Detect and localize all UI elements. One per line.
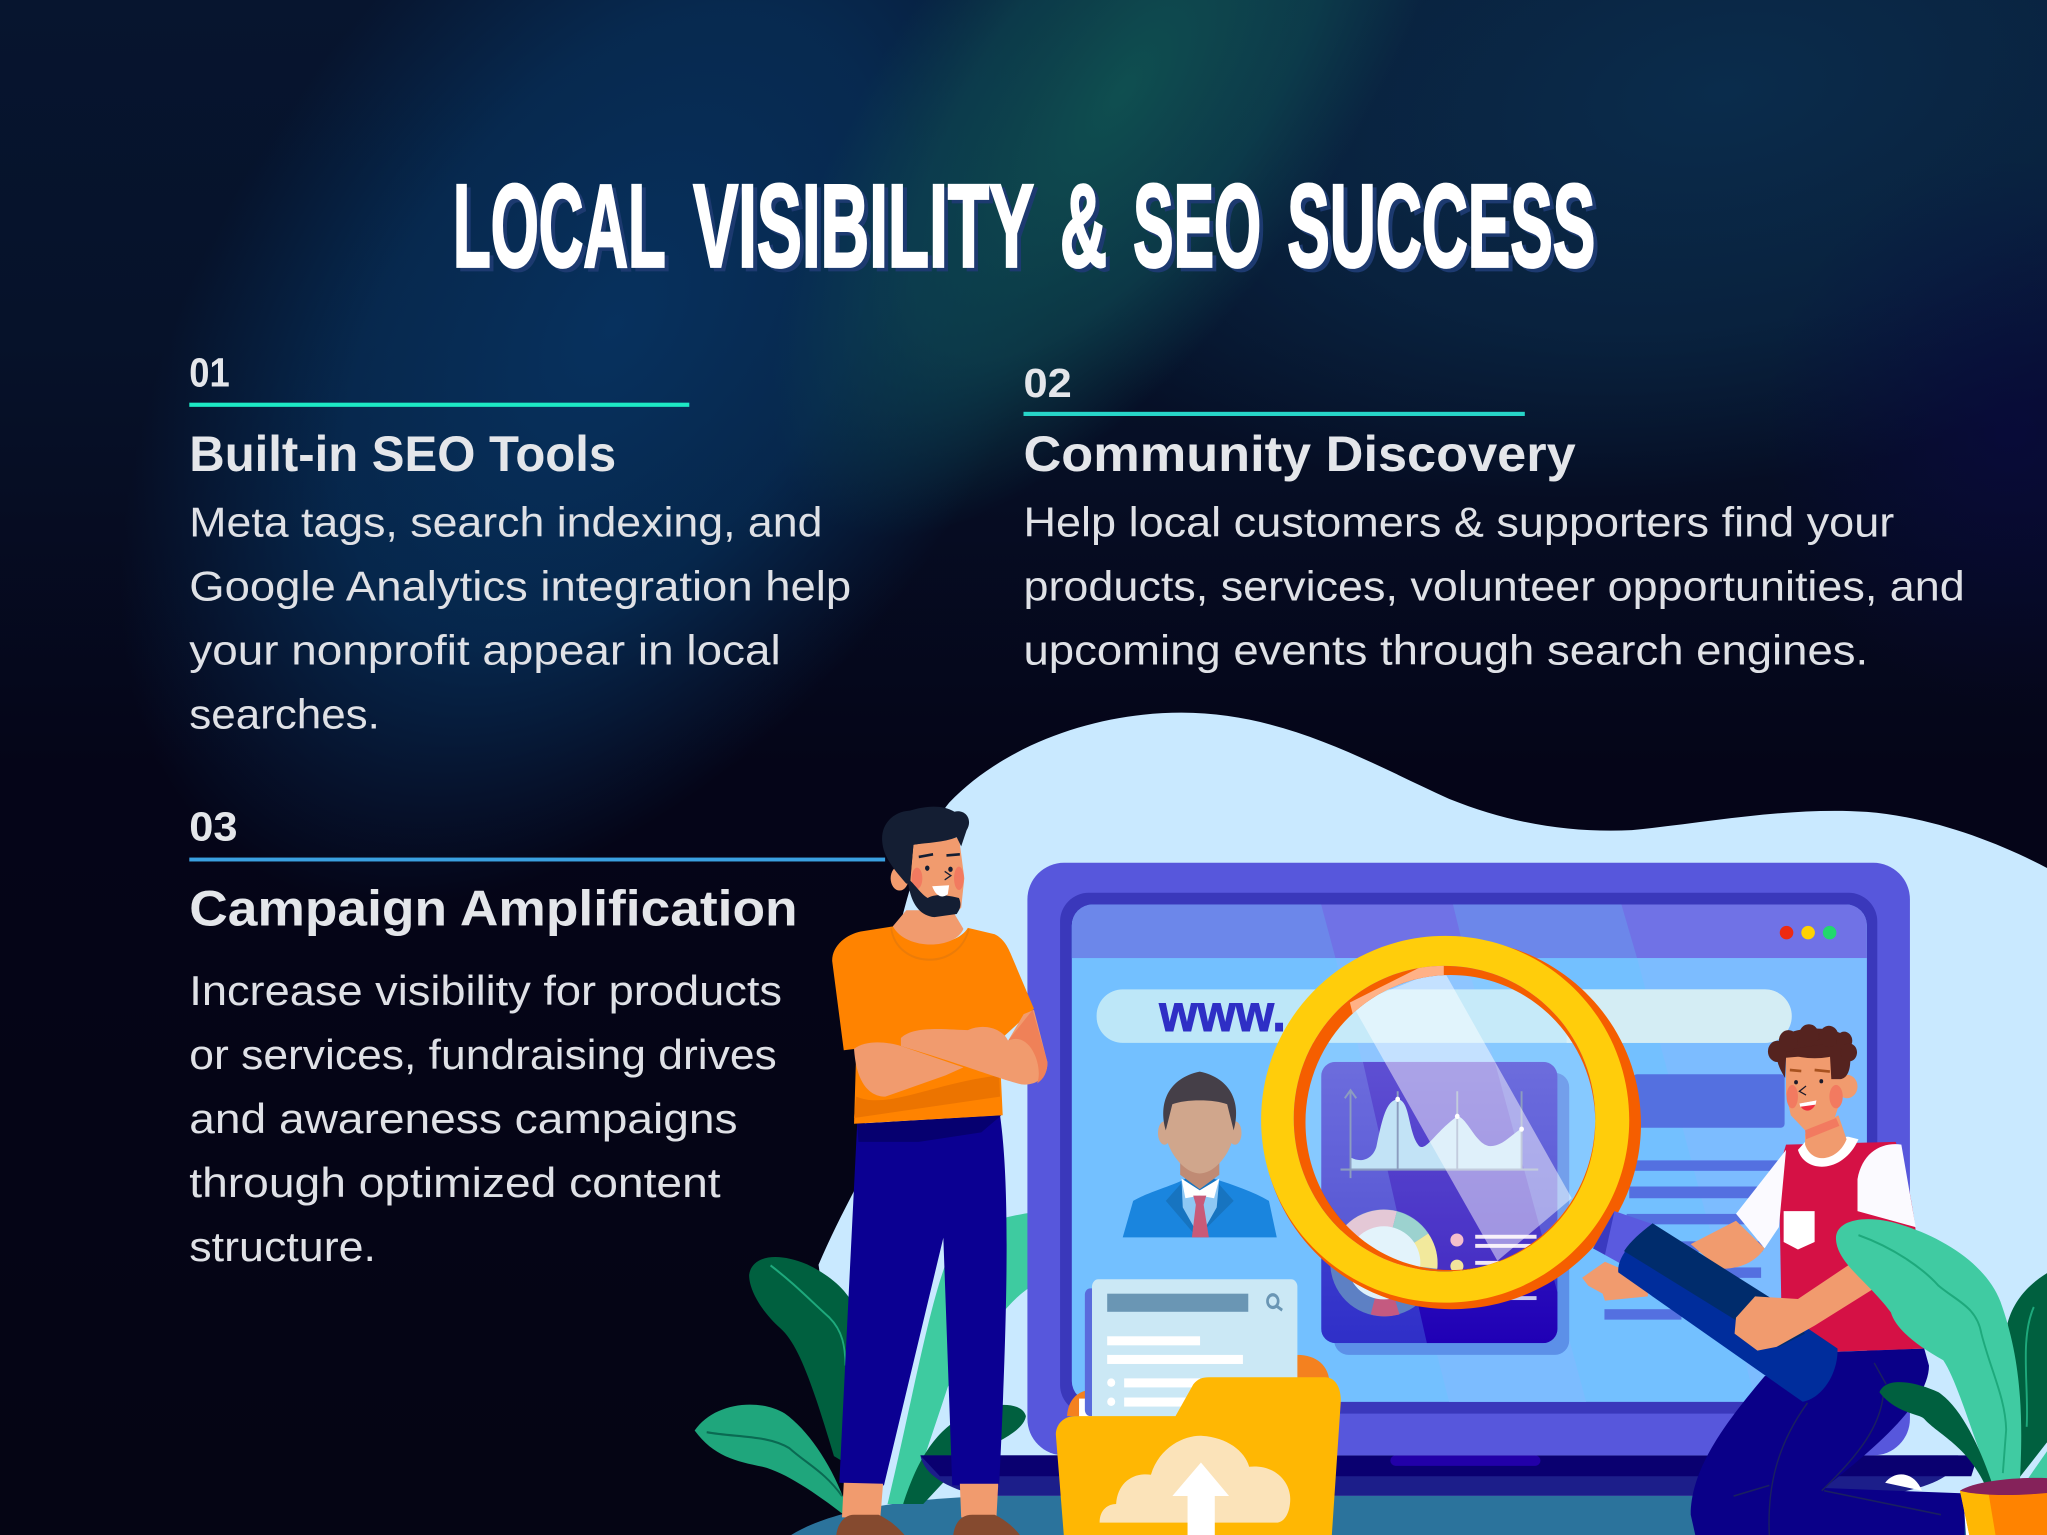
number 02: 02 <box>1024 360 1072 406</box>
panel: illustration <box>695 713 2047 1535</box>
panel: 02 community discovery <box>1024 360 1965 673</box>
title text: SEO <box>1133 160 1261 291</box>
person: standing man <box>832 807 1047 1535</box>
vest <box>1779 1142 1925 1352</box>
arm behind handle <box>1691 1221 1765 1269</box>
dashboard list <box>1450 1233 1537 1300</box>
number 01: 01 <box>189 349 230 395</box>
body text <box>189 967 782 1270</box>
body text: Help local customers & supporters find your <box>1024 498 1894 545</box>
left hand <box>1582 1262 1648 1301</box>
title text: VISIBILITY <box>693 160 1034 291</box>
title text: LOCAL <box>453 160 666 291</box>
panel: 01 built-in SEO tools <box>189 349 851 737</box>
ground <box>791 1496 2047 1535</box>
sleeves <box>1736 1144 1916 1248</box>
title shadow: SUCCESS <box>1291 164 1599 295</box>
title <box>453 160 1599 295</box>
panel: 03 campaign amplification <box>189 804 885 1270</box>
title shadow: VISIBILITY <box>697 164 1038 295</box>
body text <box>1024 498 1965 673</box>
background blob <box>819 713 2047 1535</box>
laptop base <box>920 1455 1978 1496</box>
accent line <box>1024 412 1525 416</box>
right plant and pot <box>1836 1219 2047 1535</box>
title text: & <box>1060 160 1107 291</box>
head <box>882 807 969 919</box>
title shadow: & <box>1064 164 1111 295</box>
dashboard panel <box>1321 1062 1569 1355</box>
cloud <box>1100 1436 1290 1523</box>
trousers <box>839 1115 1007 1485</box>
accent line <box>189 858 885 861</box>
body text: or services, fundraising drives <box>189 1031 777 1078</box>
heading: Community Discovery <box>1024 426 1576 482</box>
body text: your nonprofit appear in local <box>189 626 781 673</box>
title shadow: SEO <box>1137 164 1265 295</box>
folder with cloud upload <box>1056 1279 1341 1535</box>
body text: through optimized content <box>189 1159 721 1206</box>
search document <box>1092 1279 1297 1434</box>
upload arrow <box>1172 1462 1229 1535</box>
monitor <box>1027 863 1910 1455</box>
donut chart <box>1330 1209 1438 1316</box>
head <box>1768 1024 1858 1139</box>
body text: and awareness campaigns <box>189 1095 738 1142</box>
shoe <box>1885 1474 1976 1535</box>
left plants <box>695 1212 1033 1515</box>
body text: searches. <box>189 690 380 737</box>
accent line <box>189 403 689 407</box>
crossed arms <box>854 1010 1047 1118</box>
body text: structure. <box>189 1223 376 1270</box>
body text: Google Analytics integration help <box>189 562 851 609</box>
trousers <box>1691 1349 1965 1535</box>
browser dots <box>1780 926 1836 939</box>
title text <box>453 160 1595 291</box>
profile avatar <box>1123 1072 1277 1237</box>
body text <box>189 498 851 737</box>
magnifying glass <box>1261 936 1641 1309</box>
url bar: www. <box>1158 985 1286 1043</box>
neck <box>893 910 963 945</box>
url bar <box>1097 985 1792 1043</box>
person: kneeling man <box>1582 1024 1976 1535</box>
heading: Campaign Amplification <box>189 880 798 936</box>
right arm and hand <box>1735 1259 1874 1351</box>
title shadow: LOCAL <box>457 164 670 295</box>
body text: products, services, volunteer opportunities, and <box>1024 562 1965 609</box>
magnifier handle <box>1593 1211 1838 1402</box>
heading: Built-in SEO Tools <box>189 426 616 482</box>
body text: Meta tags, search indexing, and <box>189 498 822 545</box>
body text: Increase visibility for products <box>189 967 782 1014</box>
area chart <box>1341 1090 1538 1178</box>
number 03: 03 <box>189 804 238 850</box>
legs and shoes <box>836 1483 1021 1535</box>
title text: SUCCESS <box>1287 160 1595 291</box>
neck and collar <box>1798 1115 1858 1167</box>
title shadow <box>457 164 1599 295</box>
pocket <box>1784 1211 1815 1249</box>
body text: upcoming events through search engines. <box>1024 626 1868 673</box>
content bars <box>1604 1074 1789 1320</box>
shirt <box>832 926 1034 1124</box>
collar <box>891 928 969 960</box>
